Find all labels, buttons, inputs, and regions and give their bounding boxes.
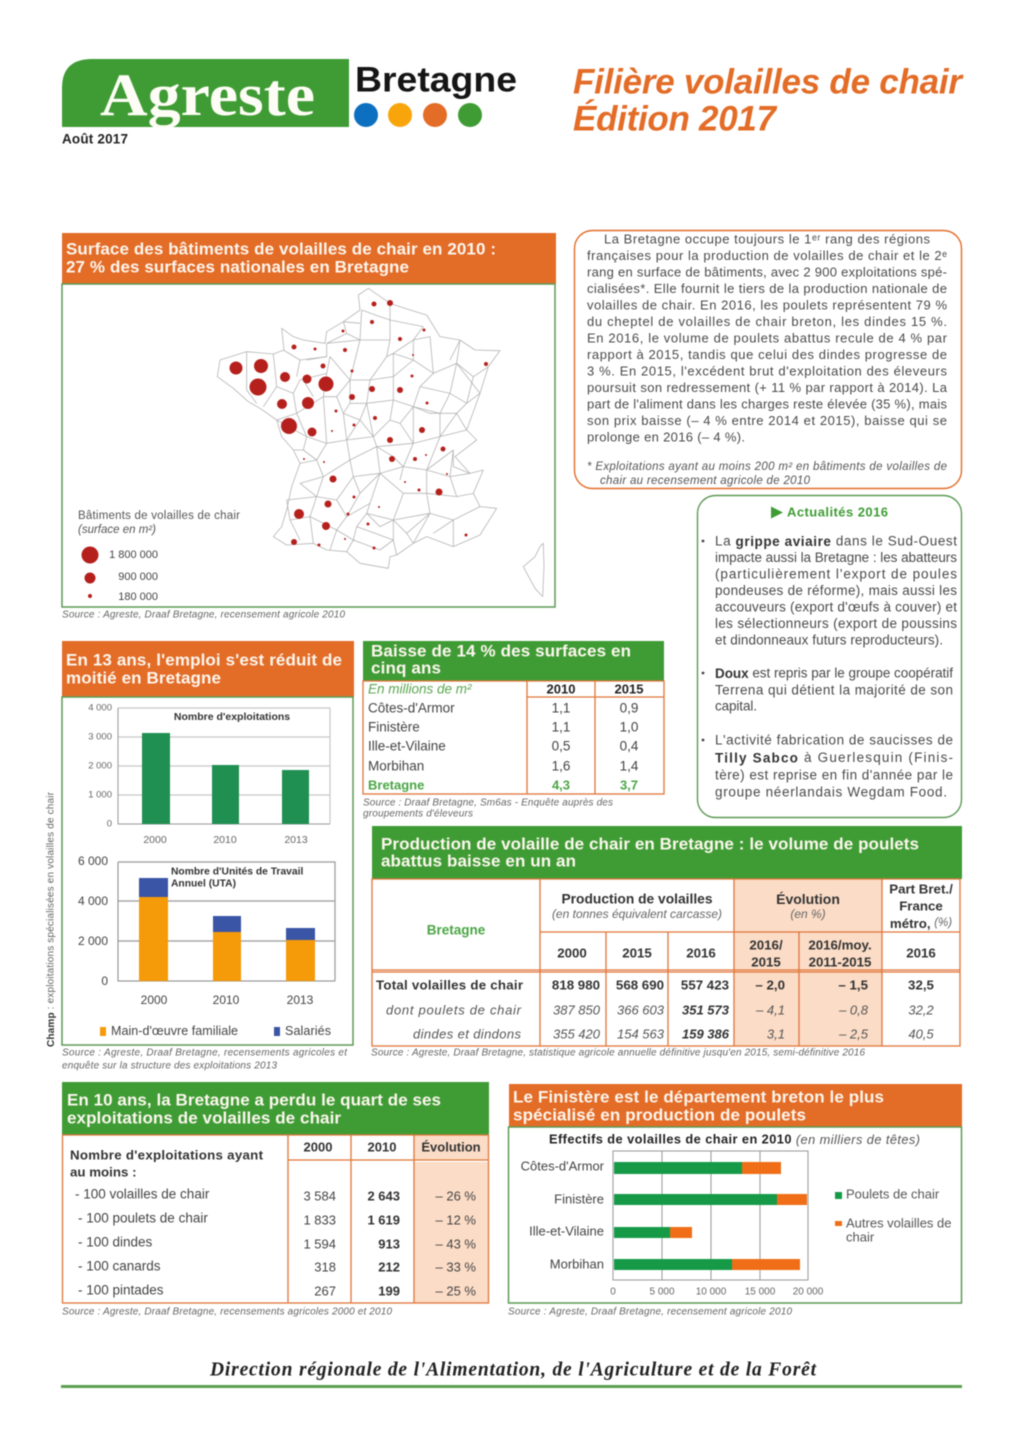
table: production: Évolution bbox=[776, 891, 840, 907]
table: production: dindes et dindons bbox=[413, 1026, 522, 1042]
table: surfaces: 2010 bbox=[547, 682, 575, 696]
table: surfaces: 1,0 bbox=[620, 720, 638, 734]
table: production: (en tonnes équivalent carcasse) bbox=[552, 907, 722, 921]
heading: farms: En 10 ans, la Bretagne a perdu le quart de ses bbox=[67, 1090, 441, 1110]
table: production: Production de volailles bbox=[561, 892, 713, 906]
table: production: France bbox=[899, 898, 943, 914]
footnote bbox=[587, 461, 947, 487]
bar chart: annual work units: Annuel (UTA) bbox=[171, 878, 236, 890]
source: surfaces bbox=[363, 798, 613, 820]
map of France bbox=[217, 288, 544, 597]
bar chart: flocks by department: 5 000 bbox=[649, 1286, 675, 1298]
bar chart: number of farms: Nombre d'exploitations bbox=[174, 711, 290, 723]
panel: production table bbox=[372, 826, 962, 1046]
table: surfaces: 0,9 bbox=[620, 700, 638, 716]
bar chart: annual work units: 6 000 bbox=[78, 854, 108, 868]
bar chart: flocks by department: 10 000 bbox=[696, 1286, 727, 1298]
table: surfaces: 0,4 bbox=[620, 738, 639, 754]
table: farms: – 12 % bbox=[436, 1212, 476, 1228]
table: production: 2016 bbox=[686, 946, 716, 960]
heading: surfaces bbox=[363, 641, 664, 681]
text block: introduction: En 2016, le volume de poulets abattus recule de 4 % par bbox=[587, 330, 948, 346]
chart legend: poultry: Poulets de chair bbox=[846, 1186, 940, 1202]
chart legend: poultry: chair bbox=[846, 1230, 875, 1244]
table: farms: - 100 canards bbox=[78, 1258, 161, 1274]
bar chart: flocks by department: Ille-et-Vilaine bbox=[529, 1224, 604, 1238]
table: surfaces: 2015 bbox=[615, 682, 643, 696]
rotated scope note: Champ : exploitations spécialisées en volailles de chair bbox=[46, 791, 56, 1047]
table: farms: 2010 bbox=[368, 1140, 396, 1154]
table: production: – 2,5 bbox=[838, 1026, 869, 1042]
heading: surface map: Surface des bâtiments de volailles de chair en 2010 : bbox=[66, 240, 496, 258]
heading: Actualités: Actualités 2016 bbox=[787, 504, 888, 520]
bar chart: number of farms: 1 000 bbox=[88, 790, 112, 800]
table: farms: – 43 % bbox=[436, 1236, 476, 1252]
source: surfaces: Source : Draaf Bretagne, Sm6as - Enquête auprès des bbox=[363, 798, 613, 808]
bar chart: annual work units: 2000 bbox=[141, 993, 168, 1007]
map legend: 180 000 bbox=[118, 591, 158, 603]
text block: introduction: son prix baisse (– 4 % entre 2014 et 2015), baisse qui se bbox=[587, 413, 947, 428]
table: farms: 318 bbox=[314, 1260, 336, 1274]
table: farms bbox=[62, 1135, 489, 1303]
table: production: 568 690 bbox=[616, 978, 664, 992]
table: production: 2011-2015 bbox=[809, 954, 872, 970]
table: production: 40,5 bbox=[908, 1026, 934, 1042]
panel: farms table bbox=[62, 1082, 489, 1303]
title: Édition 2017 bbox=[573, 100, 778, 138]
heading: employment: moitié en Bretagne bbox=[66, 668, 221, 688]
bullet: grippe aviaire: impacte aussi la Bretagne : les abatteurs bbox=[715, 550, 957, 565]
bar chart: number of farms: 2 000 bbox=[88, 760, 112, 772]
table: production: dont poulets de chair bbox=[386, 1002, 522, 1018]
text block: introduction: cialisées*. Elle fournit le tiers de la production nationale de bbox=[587, 281, 947, 296]
heading: departments: spécialisé en production de poulets bbox=[513, 1106, 806, 1124]
source: employment bbox=[62, 1048, 348, 1072]
table: production: 557 423 bbox=[681, 978, 729, 992]
table: production: Bretagne bbox=[427, 922, 486, 938]
map legend: 1 800 000 bbox=[109, 549, 158, 561]
text block: introduction: prolonge en 2016 (– 4 %). bbox=[587, 430, 745, 444]
footnote: * Exploitations ayant au moins 200 m² en bâtiments de volailles de bbox=[587, 461, 947, 473]
chart legend: poultry bbox=[835, 1186, 952, 1244]
table: farms: - 100 pintades bbox=[78, 1282, 164, 1298]
bullet: grippe aviaire: pondeuses de réforme), mais aussi les bbox=[715, 583, 957, 598]
bar chart: annual work units: 0 bbox=[101, 974, 108, 988]
source: map: Source : Agreste, Draaf Bretagne, recensement agricole 2010 bbox=[62, 610, 345, 620]
table: surfaces: 3,7 bbox=[620, 778, 638, 792]
table: farms: 913 bbox=[378, 1236, 400, 1252]
table: production: – 0,8 bbox=[838, 1002, 869, 1018]
bullet: Tilly Sabco: tère) est reprise en fin d'année par le bbox=[715, 768, 953, 782]
panel: employment bbox=[62, 641, 354, 1045]
table: farms: – 26 % bbox=[436, 1188, 476, 1204]
bar chart: annual work units: 2013 bbox=[287, 993, 314, 1007]
bar chart: flocks by department bbox=[521, 1151, 824, 1298]
bar chart: flocks by department: Côtes-d'Armor bbox=[521, 1158, 605, 1174]
bar chart: annual work units bbox=[78, 854, 335, 1007]
table: farms: Évolution bbox=[421, 1140, 481, 1154]
table: surfaces: 1,1 bbox=[552, 700, 570, 716]
logo: Agreste Bretagne bbox=[62, 59, 517, 128]
table: production: – 2,0 bbox=[755, 978, 785, 992]
text block: introduction: rapport à 2015, tandis que celui des dindes progresse de bbox=[587, 347, 947, 362]
text block: introduction: du cheptel de volailles de chair breton, les dindes 15 %. bbox=[587, 314, 947, 329]
table: production: 2016/ bbox=[749, 938, 783, 952]
title bbox=[573, 62, 964, 138]
table: farms: – 33 % bbox=[436, 1260, 476, 1274]
text block: introduction: La Bretagne occupe toujours le 1ᵉʳ rang des régions bbox=[604, 232, 930, 246]
bullet: grippe aviaire: et dindonneaux futurs reproducteurs). bbox=[715, 632, 943, 648]
chart legend: labour: Salariés bbox=[285, 1024, 331, 1038]
bar chart: annual work units: Nombre d'Unités de Travail bbox=[171, 866, 303, 878]
bullet: Tilly Sabco: Tilly Sabco à Guerlesquin (Finis- bbox=[715, 750, 953, 765]
bar chart: flocks by department: 15 000 bbox=[745, 1286, 776, 1298]
table: surfaces: 4,3 bbox=[552, 778, 570, 792]
table: farms: 212 bbox=[378, 1260, 400, 1274]
table: farms: 267 bbox=[314, 1284, 336, 1298]
bar chart: annual work units: 4 000 bbox=[78, 894, 108, 908]
panel: poultry by department bbox=[508, 1084, 962, 1303]
table: production: 3,1 bbox=[767, 1026, 785, 1042]
table: production: 818 980 bbox=[552, 978, 600, 992]
table: farms: 199 bbox=[378, 1284, 400, 1298]
text block: introduction: 3 %. En 2015, l'excédent brut d'exploitation des éleveurs bbox=[587, 364, 948, 378]
table: production: 2015 bbox=[751, 954, 781, 970]
table: surfaces: Ille-et-Vilaine bbox=[368, 738, 446, 754]
bar chart: number of farms: 4 000 bbox=[88, 702, 112, 714]
table: production: 355 420 bbox=[553, 1026, 601, 1042]
table: production: 351 573 bbox=[682, 1002, 730, 1018]
map legend: Bâtiments de volailles de chair bbox=[78, 510, 240, 522]
map legend: 900 000 bbox=[118, 571, 158, 583]
table: farms: Nombre d'exploitations ayant bbox=[70, 1148, 264, 1162]
table: production: – 4,1 bbox=[755, 1002, 785, 1018]
table: farms: – 25 % bbox=[436, 1284, 476, 1298]
table: farms: 2 643 bbox=[367, 1188, 400, 1204]
source: departments: Source : Agreste, Draaf Bretagne, recensement agricole 2010 bbox=[508, 1306, 792, 1318]
text block: introduction: part de l'aliment dans les charges reste élevée (35 %), mais bbox=[587, 396, 948, 412]
bar chart: flocks by department: Morbihan bbox=[550, 1256, 604, 1272]
bullet: Doux: Doux est repris par le groupe coopératif bbox=[715, 666, 953, 680]
source: surfaces: groupements d'éleveurs bbox=[363, 808, 473, 820]
panel: Actualités 2016 bbox=[698, 496, 962, 818]
bullet: Doux: Terrena qui détient la majorité de son bbox=[715, 682, 953, 698]
table: production: Total volailles de chair bbox=[376, 978, 523, 992]
table: production: 366 603 bbox=[617, 1002, 665, 1018]
bullet: grippe aviaire bbox=[702, 534, 957, 648]
table: production: 154 563 bbox=[617, 1026, 665, 1042]
heading: employment: En 13 ans, l'emploi s'est réduit de bbox=[66, 650, 342, 670]
bar chart: number of farms: 2000 bbox=[143, 834, 167, 846]
table: production: – 1,5 bbox=[838, 978, 869, 992]
text block: introduction: rang en surface de bâtiments, avec 2 900 exploitations spé- bbox=[587, 264, 947, 280]
bullet: Doux: capital. bbox=[715, 698, 757, 714]
table: surfaces: Morbihan bbox=[368, 758, 424, 774]
bar chart: number of farms bbox=[88, 702, 330, 846]
table: production: métro, (%) bbox=[890, 916, 952, 930]
heading: surface map: 27 % des surfaces nationales en Bretagne bbox=[66, 258, 409, 276]
bar chart: number of farms: 0 bbox=[107, 818, 112, 830]
table: production: 2015 bbox=[622, 946, 652, 960]
table: surfaces: 0,5 bbox=[552, 738, 570, 754]
table: surfaces: 1,1 bbox=[552, 720, 570, 734]
map legend: (surface en m²) bbox=[78, 524, 156, 536]
text block: introduction: françaises pour la production de volailles de chair et le 2ᵉ bbox=[587, 248, 947, 263]
table: farms: au moins : bbox=[70, 1164, 136, 1180]
heading: surface map bbox=[62, 233, 556, 284]
table: farms: - 100 poulets de chair bbox=[78, 1210, 208, 1226]
panel: map of building surfaces bbox=[62, 233, 556, 607]
chart legend: labour bbox=[100, 1024, 331, 1038]
table: production: 32,5 bbox=[908, 978, 935, 992]
logo: Agreste Bretagne: Agreste bbox=[100, 62, 315, 128]
title: Filière volailles de chair bbox=[573, 62, 964, 102]
bar chart: number of farms: 3 000 bbox=[88, 732, 112, 742]
table: surfaces: 1,6 bbox=[552, 758, 570, 774]
table: surfaces: 1,4 bbox=[620, 758, 639, 774]
text block: introduction: poursuit son redressement (+ 11 % par rapport à 2014). La bbox=[587, 380, 948, 395]
heading: farms: exploitations de volailles de chair bbox=[67, 1108, 341, 1128]
table: farms: 1 833 bbox=[303, 1212, 336, 1228]
panel: surfaces table bbox=[363, 641, 664, 794]
footnote: chair au recensement agricole de 2010 bbox=[600, 475, 811, 487]
table: farms: 2000 bbox=[304, 1140, 332, 1154]
table: production: 2016 bbox=[906, 946, 936, 960]
heading: production bbox=[372, 826, 962, 879]
table: farms: 3 584 bbox=[303, 1188, 336, 1204]
heading: production: Production de volaille de chair en Bretagne : le volume de poulets bbox=[381, 834, 919, 854]
bullet: Tilly Sabco bbox=[702, 732, 953, 800]
table: farms: 1 594 bbox=[303, 1236, 336, 1252]
bar chart: annual work units: 2010 bbox=[213, 993, 240, 1007]
bar chart: number of farms: 2013 bbox=[284, 834, 308, 846]
bullet: Tilly Sabco: groupe néerlandais Wegdam Food. bbox=[715, 784, 947, 800]
chart legend: labour: Main-d'œuvre familiale bbox=[111, 1024, 238, 1038]
table: production: 159 386 bbox=[682, 1026, 730, 1042]
logo: Agreste Bretagne: Bretagne bbox=[355, 60, 517, 100]
heading: surfaces: Baisse de 14 % des surfaces en bbox=[371, 642, 631, 660]
bullet: Tilly Sabco: L'activité fabrication de saucisses de bbox=[715, 732, 953, 748]
text block: introduction bbox=[574, 230, 962, 488]
bullet: Doux bbox=[702, 666, 953, 714]
table: production: 2000 bbox=[557, 946, 587, 960]
table: surfaces: En millions de m² bbox=[368, 682, 472, 696]
bar chart: annual work units: 2 000 bbox=[78, 934, 108, 948]
heading: surfaces: cinq ans bbox=[371, 658, 441, 678]
table: production: Part Bret./ bbox=[889, 882, 953, 896]
bullet: grippe aviaire: La grippe aviaire dans le Sud-Ouest bbox=[715, 534, 957, 548]
bar chart: flocks by department: 20 000 bbox=[793, 1286, 824, 1298]
heading: production: abattus baisse en un an bbox=[381, 852, 576, 870]
text block: introduction: volailles de chair. En 2016, les poulets représentent 79 % bbox=[587, 298, 947, 312]
heading: departments bbox=[509, 1084, 962, 1127]
chart title: Effectifs de volailles de chair en 2010 (en milliers de têtes) bbox=[549, 1132, 920, 1146]
table: farms: - 100 volailles de chair bbox=[75, 1186, 210, 1202]
bullet: grippe aviaire: (particulièrement l'export de poules bbox=[715, 566, 957, 582]
table: surfaces: Bretagne bbox=[368, 778, 424, 792]
source: employment: Source : Agreste, Draaf Bretagne, recensements agricoles et bbox=[62, 1048, 348, 1058]
table: production: 32,2 bbox=[908, 1002, 934, 1018]
bullet: grippe aviaire: les sélectionneurs (export de poussins bbox=[715, 616, 957, 631]
date: Août 2017 bbox=[62, 132, 128, 146]
table: production: 2016/moy. bbox=[808, 938, 872, 952]
source: employment: enquête sur la structure des exploitations 2013 bbox=[62, 1060, 277, 1072]
bullet: grippe aviaire: accouveurs (export d'œufs à couver) et bbox=[715, 600, 957, 614]
table: surfaces bbox=[363, 681, 664, 794]
footer: Direction régionale de l'Alimentation, de l'Agriculture et de la Forêt bbox=[209, 1360, 817, 1380]
chart legend: poultry: Autres volailles de bbox=[846, 1216, 952, 1230]
bar chart: flocks by department: Finistère bbox=[554, 1192, 604, 1206]
table: farms: 1 619 bbox=[367, 1212, 400, 1228]
table: surfaces: Finistère bbox=[368, 720, 420, 734]
footer bbox=[61, 1360, 962, 1388]
table: production: 387 850 bbox=[553, 1002, 601, 1018]
table: surfaces: Côtes-d'Armor bbox=[368, 700, 455, 716]
bar chart: flocks by department: 0 bbox=[610, 1286, 616, 1298]
heading: employment bbox=[62, 641, 354, 697]
heading: departments: Le Finistère est le département breton le plus bbox=[513, 1088, 884, 1106]
map legend bbox=[78, 510, 240, 603]
bar chart: number of farms: 2010 bbox=[213, 834, 237, 846]
source: production: Source : Agreste, Draaf Bretagne, statistique agricole annuelle définitive jusqu'en 2015, semi-définitive 2016 bbox=[371, 1048, 865, 1058]
heading: farms bbox=[62, 1082, 489, 1135]
table: farms: - 100 dindes bbox=[78, 1234, 153, 1250]
source: farms: Source : Agreste, Draaf Bretagne, recensements agricoles 2000 et 2010 bbox=[62, 1306, 392, 1318]
table: production: (en %) bbox=[790, 907, 826, 921]
table: production bbox=[372, 879, 960, 1046]
